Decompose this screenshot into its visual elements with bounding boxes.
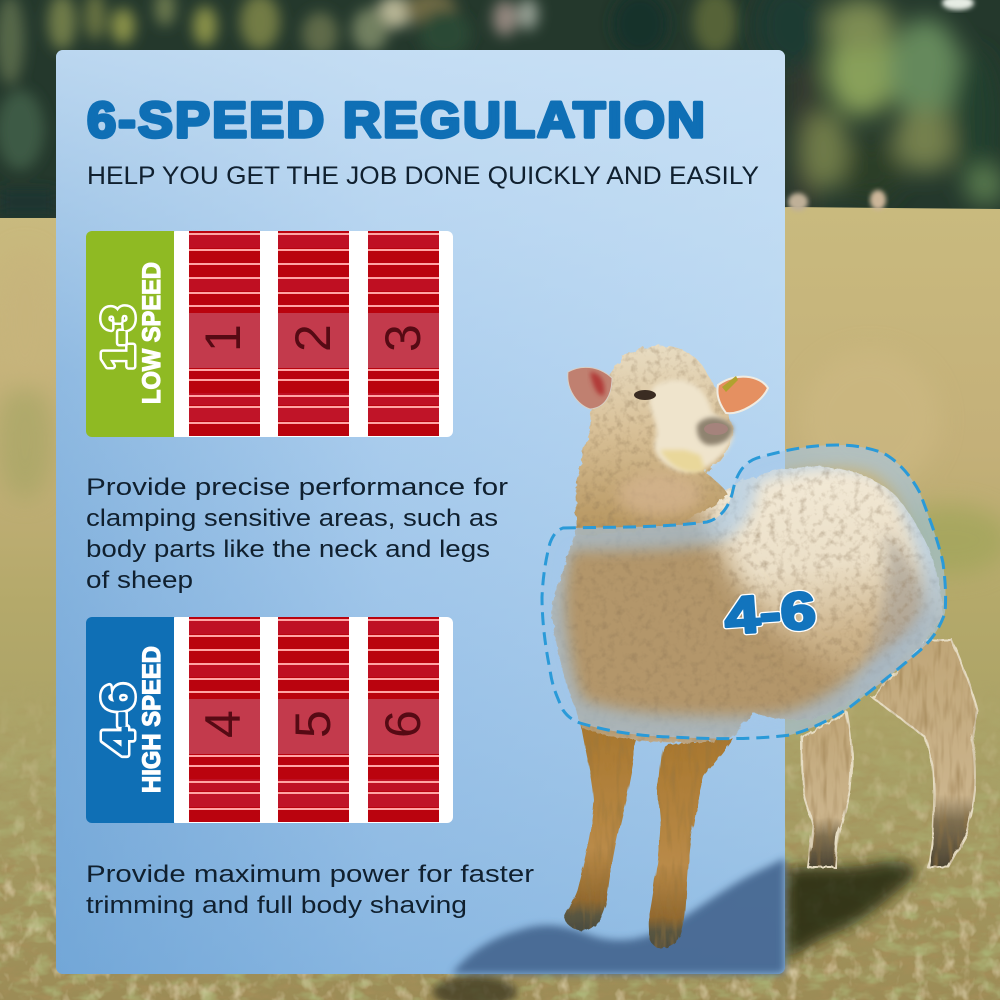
range label 4-6: 4-6 (94, 684, 143, 755)
low speed description: Provide precise performance for (86, 474, 508, 501)
speed bar 1 (189, 231, 260, 436)
front legs (565, 725, 733, 948)
panel: low speed control (86, 231, 453, 437)
sheep illustration (540, 346, 977, 948)
speed bar 5 (278, 617, 349, 822)
label HIGH SPEED: HIGH SPEED (138, 646, 166, 793)
speed bar 4 (189, 617, 260, 822)
low speed description: body parts like the neck and legs (86, 536, 490, 563)
ground shadow on panel (452, 858, 785, 974)
label LOW SPEED: LOW SPEED (138, 262, 166, 404)
speed bar 3 (368, 231, 439, 436)
ear: left (568, 367, 612, 409)
speed bar 3: 3 (375, 324, 431, 352)
range label 1-3: 1-3 (94, 306, 143, 369)
speed bar 6 (368, 617, 439, 822)
range label 1-3: 1-3 (94, 306, 143, 369)
speed bar 5: 5 (285, 710, 341, 738)
card background (170, 231, 453, 437)
face (634, 380, 733, 472)
panel: high speed control (86, 617, 453, 823)
dashed outline (542, 445, 946, 739)
subtitle: HELP YOU GET THE JOB DONE QUICKLY AND EASILY (87, 162, 759, 190)
speed bar 2 (278, 231, 349, 436)
high speed description: trimming and full body shaving (86, 892, 467, 919)
head and neck (576, 346, 733, 535)
speed bar 1: 1 (195, 324, 251, 352)
speed bar 4: 4 (195, 710, 251, 738)
zone label 4-6: 4-6 (723, 582, 818, 646)
range label 4-6: 4-6 (94, 684, 143, 755)
low speed description: of sheep (86, 567, 193, 594)
zone label 4-6: 4-6 (723, 582, 818, 646)
chest under chin (618, 473, 702, 517)
ear: right with tag (717, 376, 768, 413)
blue label tab (86, 617, 174, 823)
speed bar 2: 2 (285, 324, 341, 352)
zone overlay: speed 4-6 area (542, 445, 946, 739)
speed bar 6: 6 (375, 710, 431, 738)
card background (170, 617, 453, 823)
panel: translucent blue card (56, 50, 785, 974)
title: 6-SPEED REGULATION (87, 92, 707, 148)
green label tab (86, 231, 174, 437)
low speed description: clamping sensitive areas, such as (86, 505, 498, 532)
body and wool (540, 467, 943, 750)
high speed description: Provide maximum power for faster (86, 861, 534, 888)
hind legs (802, 640, 977, 867)
